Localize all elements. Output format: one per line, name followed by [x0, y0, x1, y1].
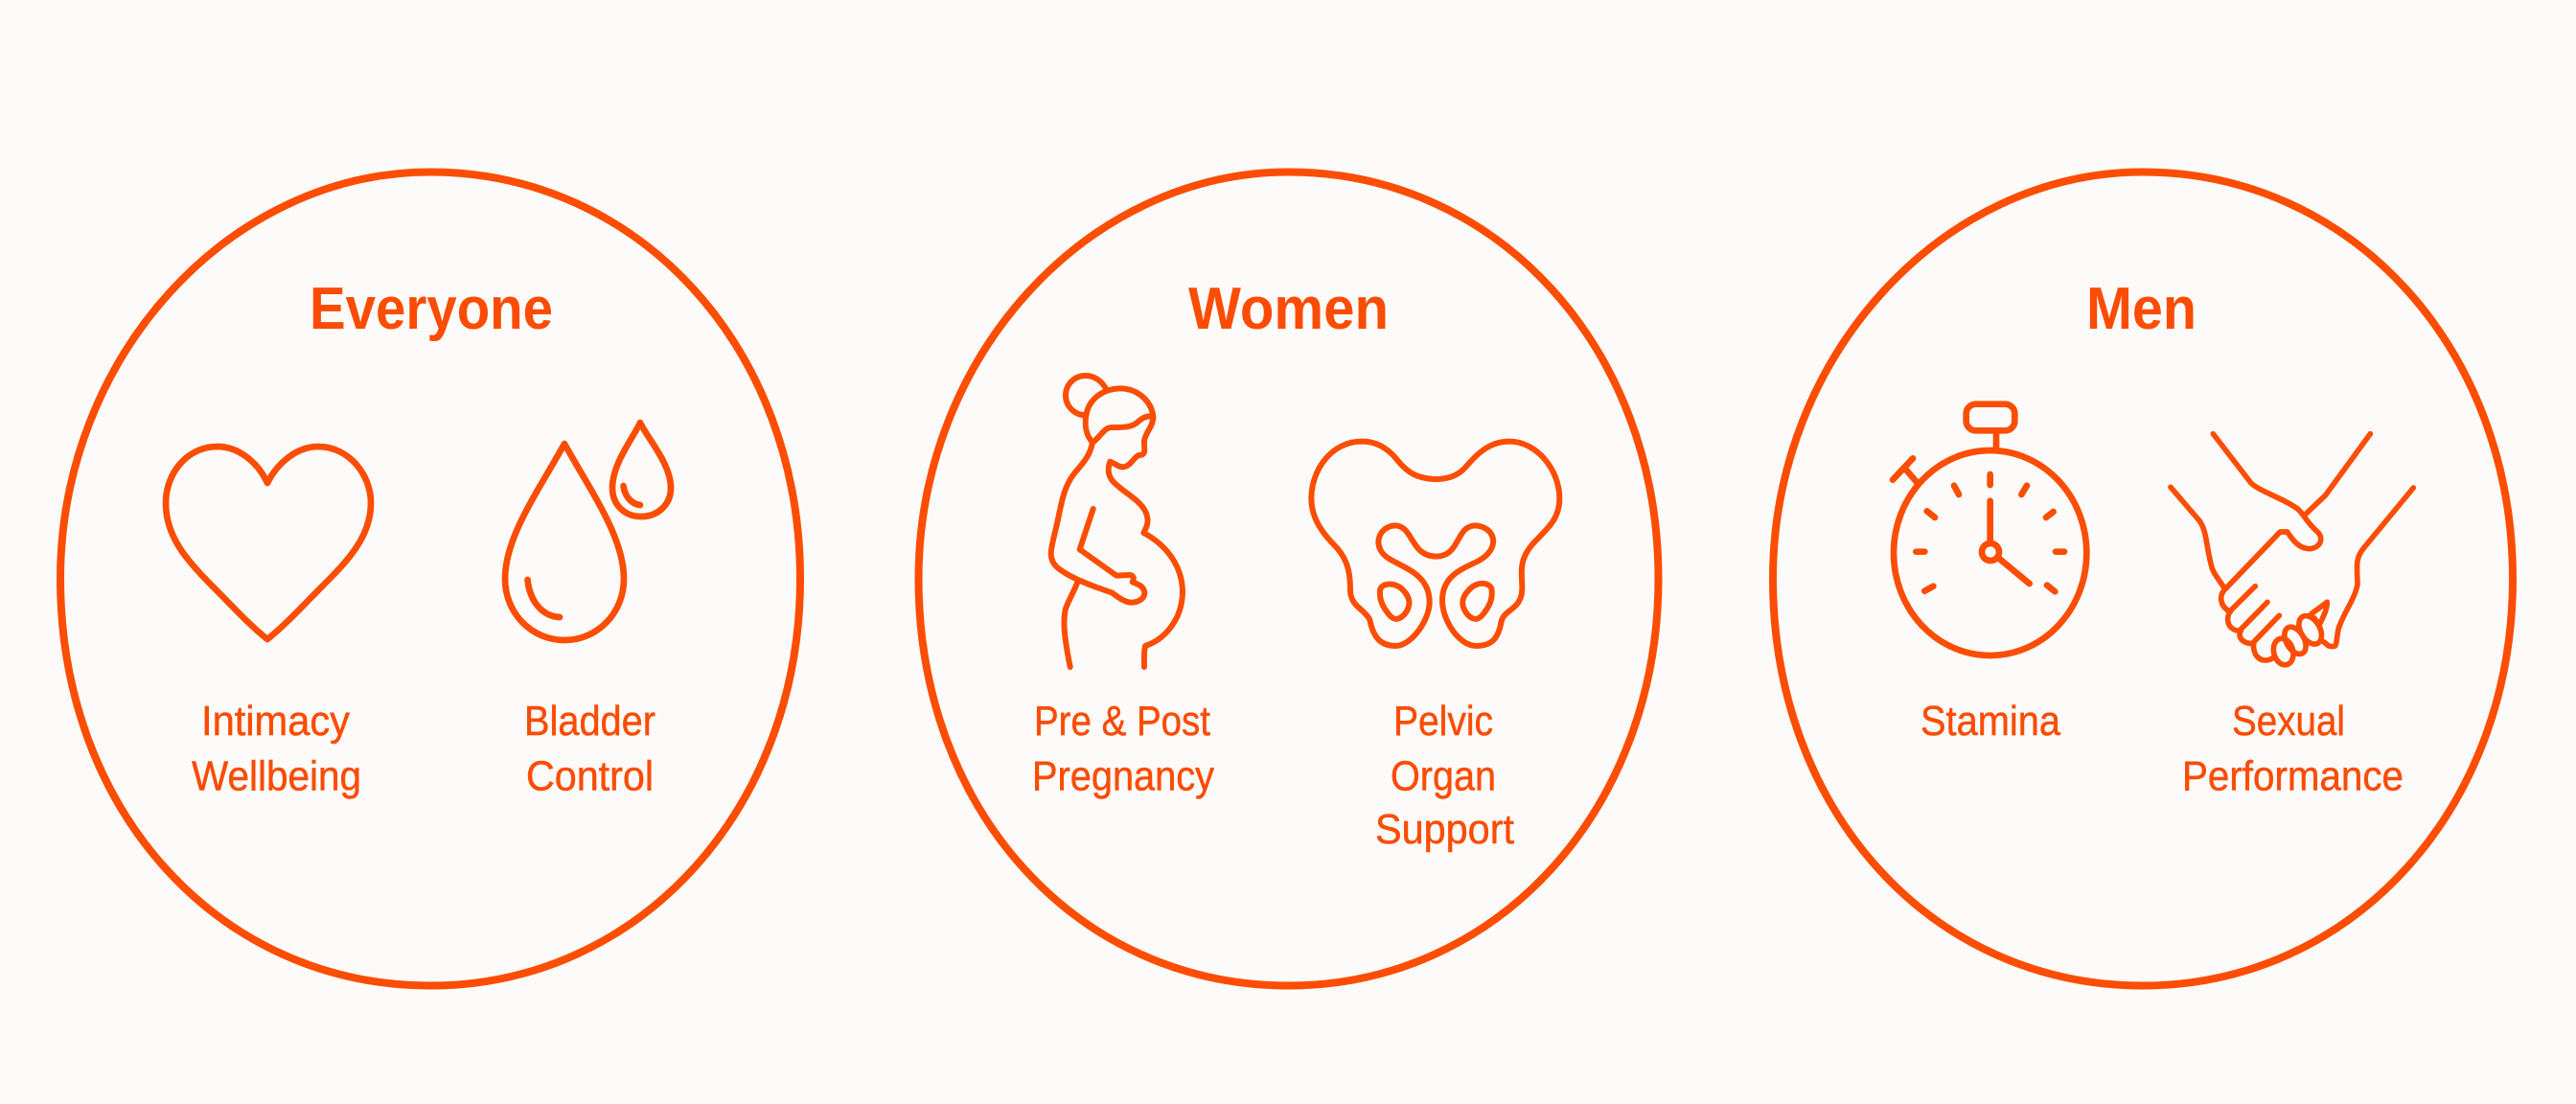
label: pelvic organ support: [1375, 698, 1514, 853]
label: intimacy wellbeing: [192, 698, 361, 799]
panel: men: [1773, 172, 2513, 985]
label: bladder control: Bladder: [524, 698, 656, 745]
heading: women: Women: [1188, 276, 1389, 342]
heading: men: Men: [2086, 276, 2196, 342]
ring: everyone: [60, 172, 800, 985]
label: pre and post pregnancy: Pre & Post: [1034, 698, 1210, 745]
label: pelvic organ support: Pelvic: [1393, 698, 1493, 745]
label: pre and post pregnancy: [1032, 698, 1214, 799]
heading: everyone: Everyone: [310, 276, 553, 342]
label: bladder control: [524, 698, 656, 799]
ring: men: [1773, 172, 2513, 985]
label: bladder control: Control: [526, 753, 654, 799]
panel: women: [918, 172, 1658, 985]
label: intimacy wellbeing: Wellbeing: [192, 753, 361, 799]
label: sexual performance: Sexual: [2232, 698, 2345, 745]
label: intimacy wellbeing: Intimacy: [201, 698, 350, 745]
label: sexual performance: Performance: [2182, 753, 2404, 799]
label: pre and post pregnancy: Pregnancy: [1032, 753, 1214, 799]
label: sexual performance: [2182, 698, 2404, 799]
icon: pelvis: [1311, 442, 1559, 646]
label: pelvic organ support: Support: [1375, 806, 1514, 853]
icon: pregnant woman: [1051, 376, 1183, 667]
ring: women: [918, 172, 1658, 985]
label: pelvic organ support: Organ: [1391, 753, 1496, 799]
label: stamina: Stamina: [1920, 698, 2060, 745]
icon: stopwatch: [1893, 404, 2086, 656]
icon: water drops: [505, 423, 671, 640]
icon: clasped hands: [2171, 434, 2413, 667]
icon: heart: [166, 447, 371, 639]
panel: everyone: [60, 172, 800, 985]
